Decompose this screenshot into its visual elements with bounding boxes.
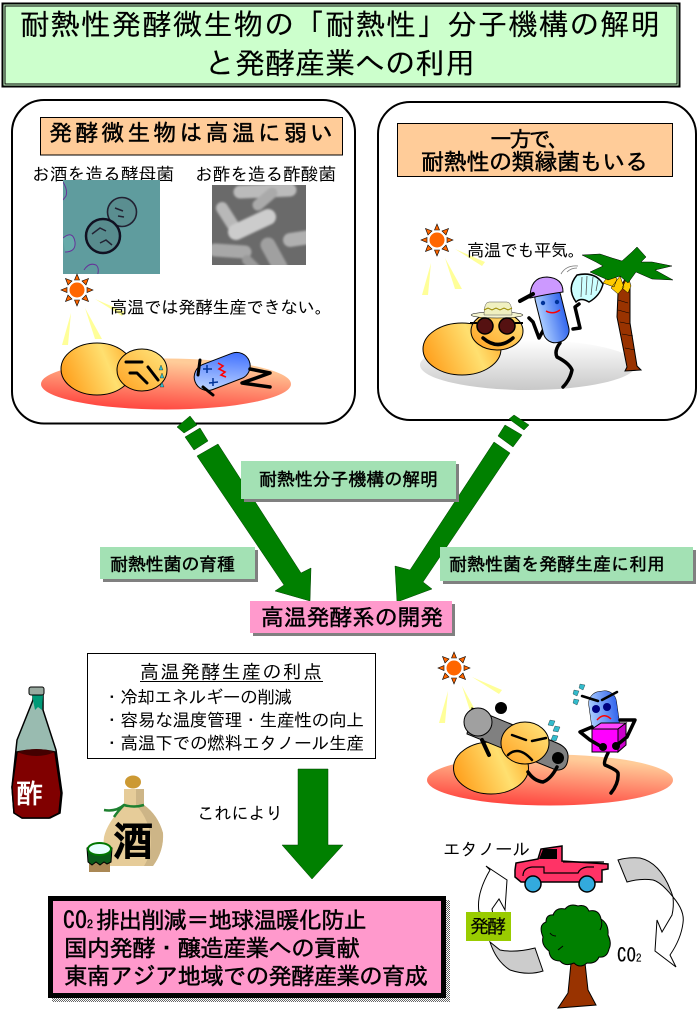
caption: fine even at high temperature: 高温でも平気。 <box>467 242 585 260</box>
yeast label: お酒を造る酵母菌 <box>32 166 174 184</box>
label: fermentation <box>466 912 511 941</box>
results box <box>50 898 450 1002</box>
icon: vinegar bottle <box>12 687 62 818</box>
panel heading: 発酵微生物は高温に弱い <box>49 121 333 144</box>
label: high-temperature fermentation system development: 高温発酵系の開発 <box>261 606 443 628</box>
happy bacterium with cap and fan <box>520 266 603 387</box>
results box: 国内発酵・醸造産業への貢献 <box>64 936 360 960</box>
panel heading <box>398 124 672 176</box>
cool ground <box>420 340 636 390</box>
icon: tree <box>541 905 610 1008</box>
box: advantages of high-temperature fermentation <box>88 654 376 758</box>
title: と発酵産業への利用 <box>205 48 475 78</box>
label: breeding heat-tolerant strains: 耐熱性菌の育種 <box>110 554 235 574</box>
arrow: right panel to development <box>395 415 529 602</box>
icon: sake flask and cup: 酒 <box>113 820 153 860</box>
hot ground <box>427 754 673 806</box>
arrow: left panel to development <box>177 416 311 601</box>
title <box>2 4 680 86</box>
cycle arrows <box>478 858 683 973</box>
box: advantages of high-temperature fermentation: ・高温下での燃料エタノール生産 <box>103 734 364 752</box>
caption: cannot ferment at high temperature: 高温では発酵生産できない。 <box>110 298 332 316</box>
yeast character straining with cylinder <box>454 702 568 794</box>
label: elucidating heat-tolerance mechanism <box>241 461 459 502</box>
text: ethanol: エタノール <box>443 842 530 858</box>
label: using heat-tolerant strains for production: 耐熱性菌を発酵生産に利用 <box>449 554 665 574</box>
exhausted yeast character <box>61 343 167 395</box>
palm tree <box>582 247 673 371</box>
results box: 排出削減＝地球温暖化防止 <box>96 908 367 932</box>
text: CO2: CO2 <box>617 946 642 965</box>
box: advantages of high-temperature fermentation: ・冷却エネルギーの削減 <box>103 688 292 706</box>
arrow: down to results <box>282 769 343 879</box>
panel heading: 耐熱性の類縁菌もいる <box>421 150 648 173</box>
icon: sake flask and cup <box>87 776 163 872</box>
panel: heat-tolerant relatives exist <box>378 102 696 420</box>
icon: vinegar bottle: 酢 <box>16 780 43 807</box>
icon: sun <box>421 224 485 295</box>
icon: sun <box>61 274 125 345</box>
panel heading: 一方で、 <box>490 128 570 150</box>
box: advantages of high-temperature fermentation: ・容易な温度管理・生産性の向上 <box>103 712 364 730</box>
acetic acid bacteria micrograph <box>212 185 310 270</box>
label: elucidating heat-tolerance mechanism: 耐熱性分子機構の解明 <box>259 470 438 488</box>
panel heading <box>40 118 342 155</box>
title: 耐熱性発酵微生物の「耐熱性」分子機構の解明 <box>20 9 660 39</box>
panel: fermenting microbes are weak to heat <box>12 100 355 424</box>
icon: pickup truck <box>515 846 608 892</box>
happy yeast character with hat and sunglasses <box>423 302 523 375</box>
hot ground <box>41 358 291 410</box>
exhausted bacterium character <box>190 348 270 395</box>
box: advantages of high-temperature fermentation: 高温発酵生産の利点 <box>140 662 322 682</box>
label: using heat-tolerant strains for production <box>440 547 696 584</box>
icon: sun <box>438 652 502 723</box>
acetic acid bacteria label: お酢を造る酢酸菌 <box>195 166 336 184</box>
bacterium character carrying box <box>573 684 635 793</box>
results box: 東南アジア地域での発酵産業の育成 <box>64 964 428 988</box>
label: breeding heat-tolerant strains <box>100 547 258 582</box>
text: thereby: これにより <box>197 806 283 822</box>
label: fermentation: 発酵 <box>470 917 506 936</box>
label: high-temperature fermentation system development <box>250 601 455 636</box>
yeast micrograph <box>63 180 160 277</box>
results box: CO2 <box>63 908 93 932</box>
